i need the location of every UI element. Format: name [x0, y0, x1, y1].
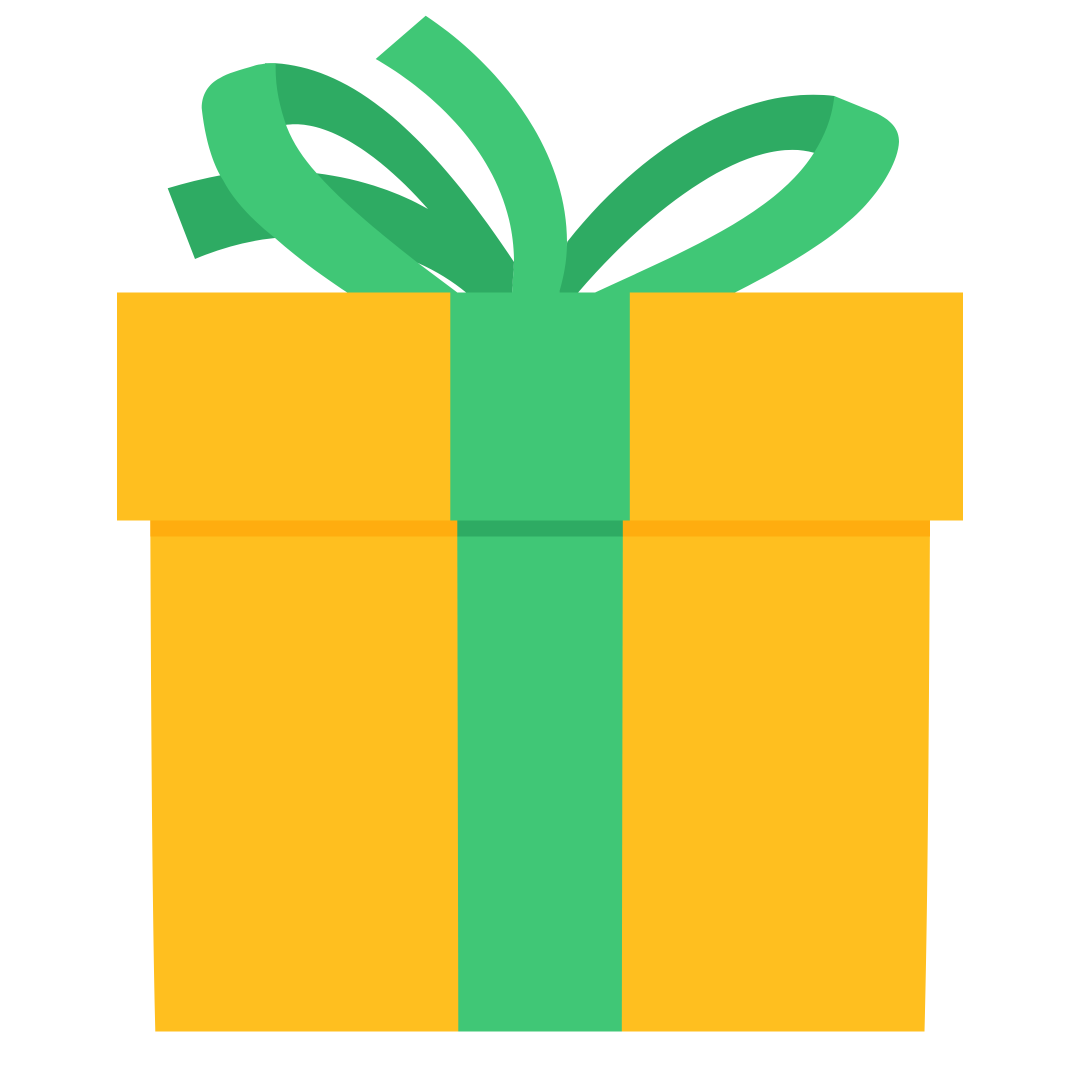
left bow loop, front — [202, 63, 458, 293]
ribbon shadow band — [457, 520, 623, 536]
right bow loop, back — [559, 95, 848, 293]
lid panel — [117, 292, 963, 520]
vertical ribbon on body — [457, 536, 623, 1032]
vertical ribbon on lid — [450, 292, 630, 520]
left bow loop, back — [265, 63, 514, 293]
left ribbon tail — [168, 170, 285, 259]
box body — [150, 520, 930, 1032]
lid shadow band — [150, 520, 930, 536]
box lid — [117, 292, 963, 520]
centre ribbon tail — [376, 16, 567, 293]
bow ribbon — [168, 16, 899, 293]
right bow loop, front — [594, 96, 899, 293]
body panel — [150, 520, 930, 1032]
